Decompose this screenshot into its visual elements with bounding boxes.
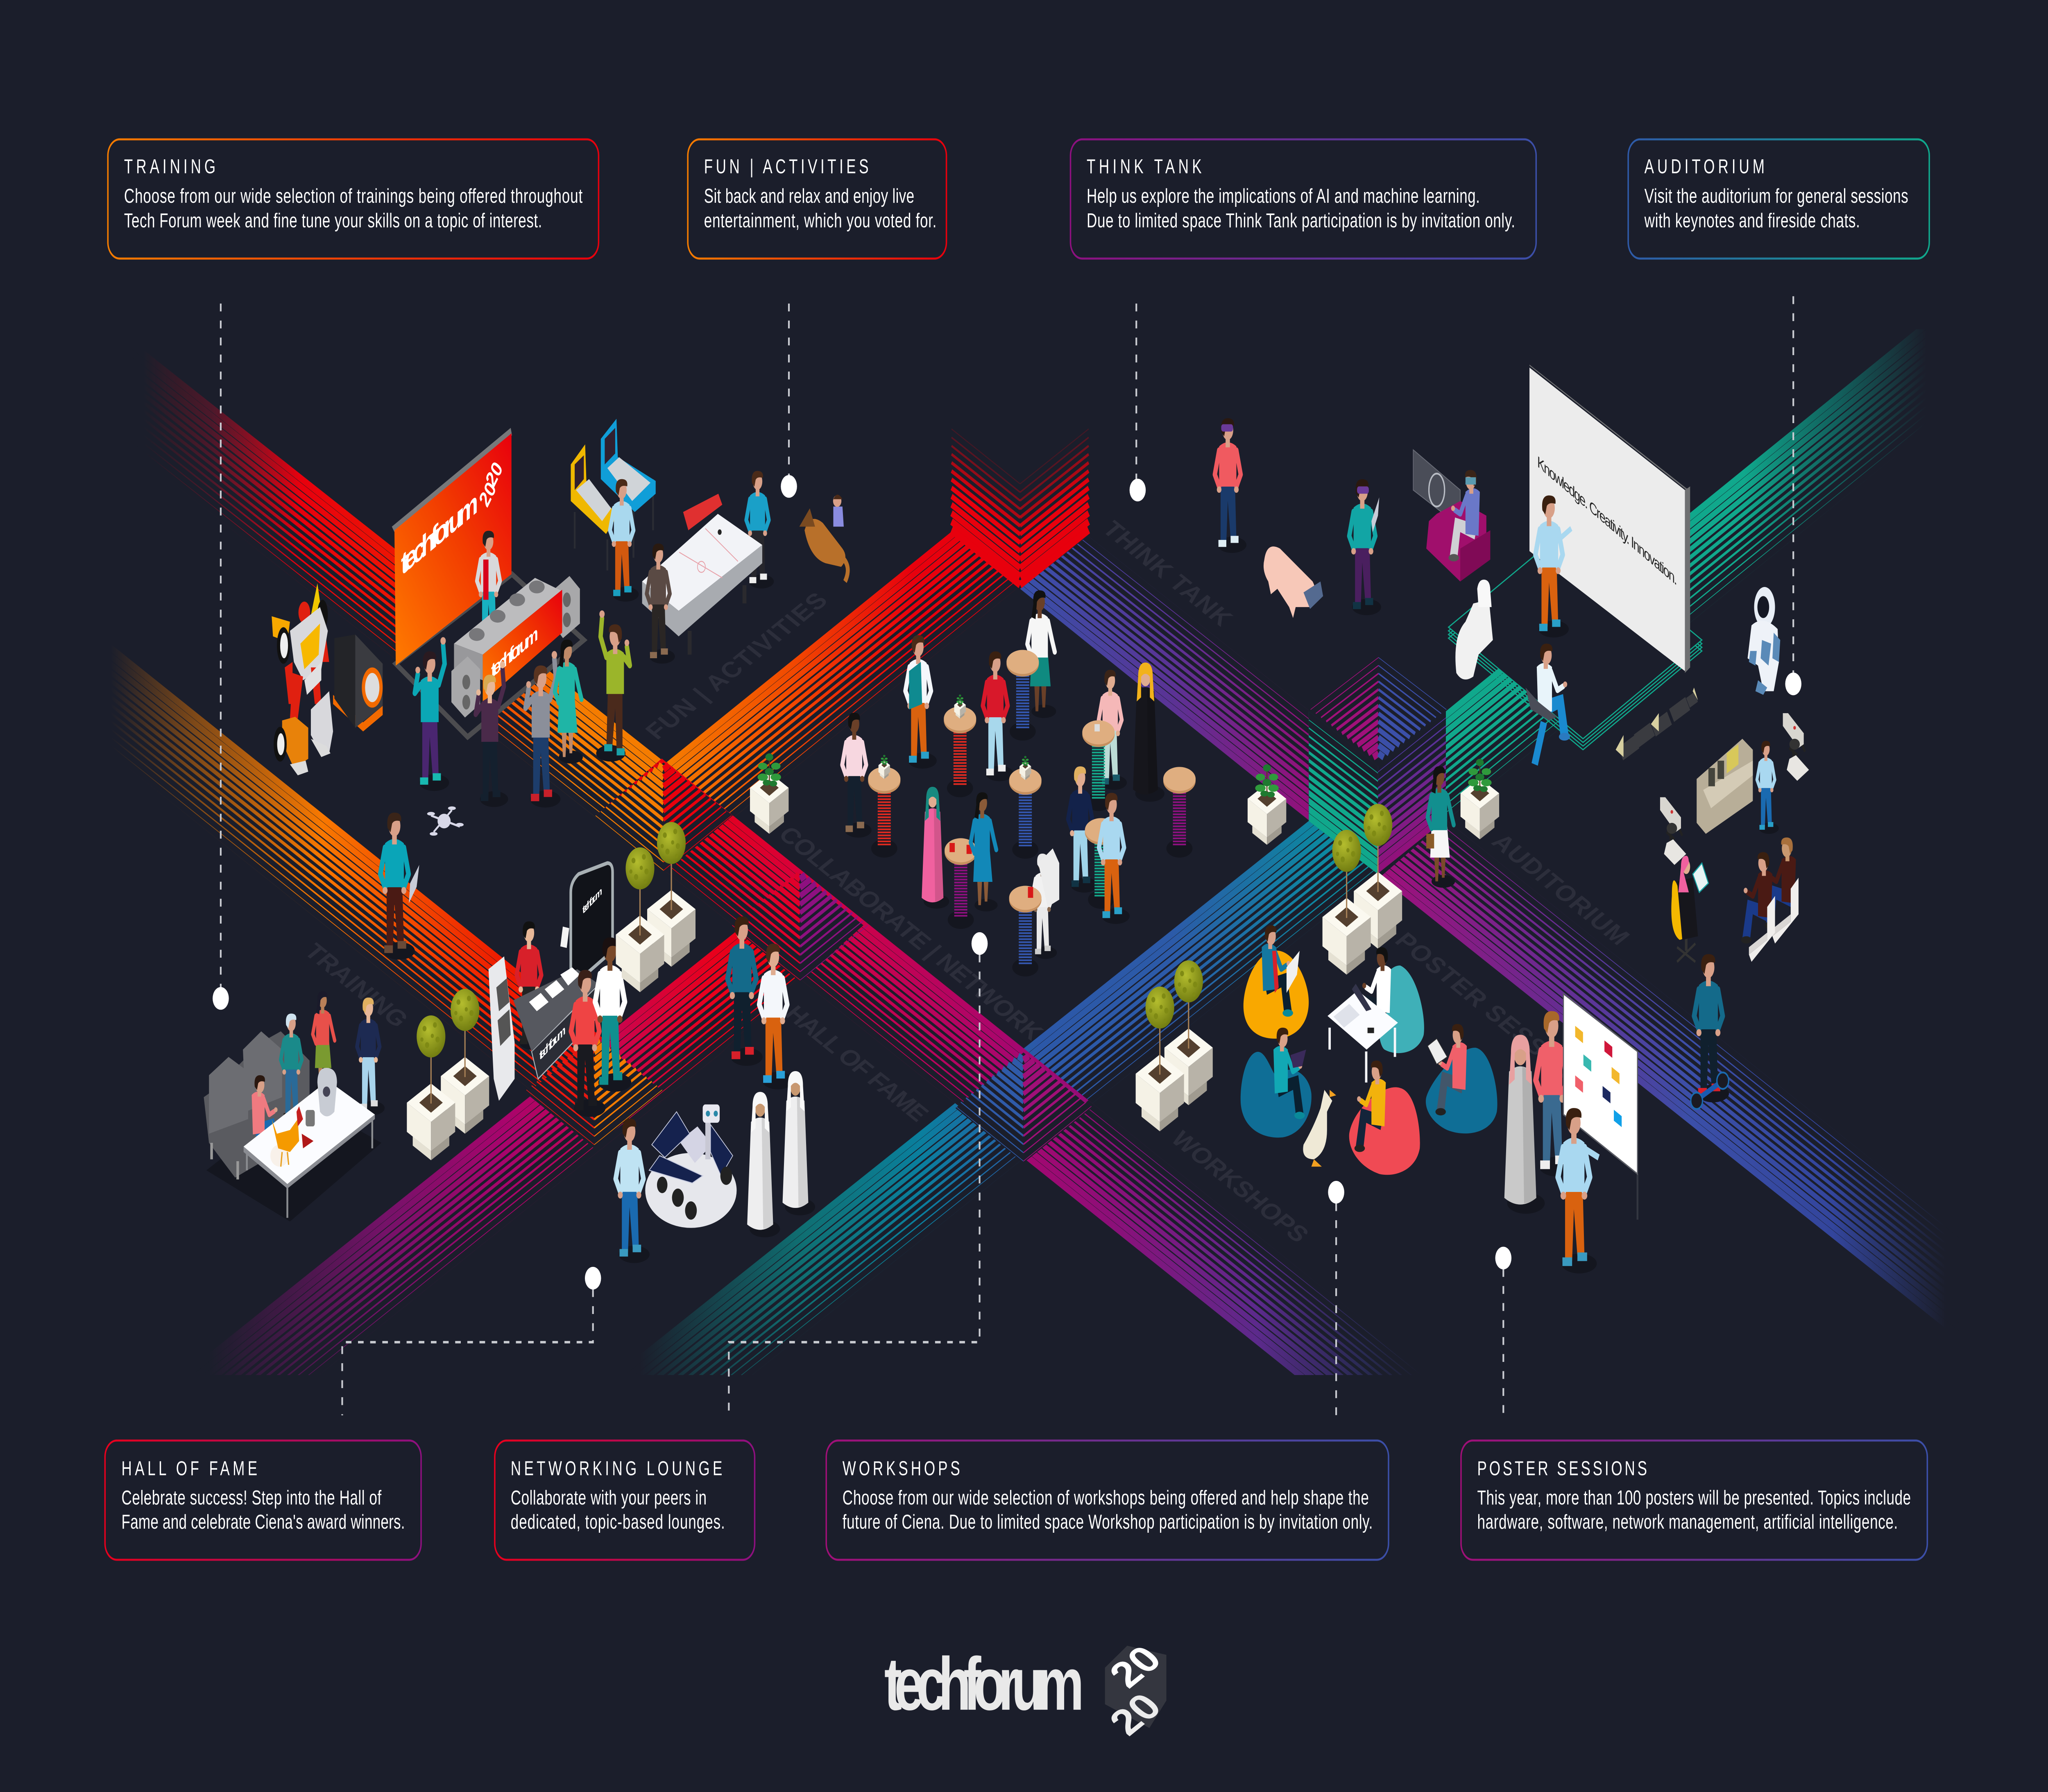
table [1006,650,1039,741]
person: red jacket [983,651,1013,781]
screen tagline: Knowledge. Creativity. Innovation. [1537,452,1677,589]
holographic panel [1413,450,1460,527]
teal bean bag [1360,947,1424,1053]
player front [647,544,675,664]
shadow [206,1097,381,1221]
player back [746,471,774,589]
body text [1477,1486,1911,1534]
scene: DJ stage and big screen [392,428,584,737]
person: man pointing [1558,1108,1599,1273]
speaker left [451,657,480,718]
body text [1087,185,1515,232]
junction diamond: fun and training [596,763,733,874]
woman in sari [313,991,336,1093]
blue bean bag left [1241,1028,1312,1137]
table with cup [1009,886,1042,976]
body text [704,185,936,232]
planters: workshop tree pair right [1323,804,1402,974]
blue bean bag right [1426,1024,1497,1133]
body text: Collaborate with your peers in [511,1486,707,1509]
person: man with backpack [905,635,937,769]
man with cap [281,1014,306,1124]
poster board [1637,1174,1638,1220]
marker dots [213,475,1801,1289]
display stand [489,956,514,1101]
robot [310,583,321,622]
scene: virtual reality area [1215,418,1490,618]
floor band: purple junction segment [1377,709,1447,874]
visitor red top [571,970,605,1117]
deck banner [483,590,562,702]
chevron: red think tank corner [952,429,1089,585]
person: blonde with cap [1068,766,1098,893]
heading: THINK TANK [1087,155,1202,178]
camera: right [1783,713,1809,781]
scene: DJ stage and big screen: 20 [476,477,500,511]
scene: rover exhibit [616,1071,815,1263]
body text: Tech Forum week and fine tune your skills on a topic of interest. [124,209,542,232]
DJ [477,531,505,651]
stage lights [1616,688,1698,760]
panel: training [108,139,598,258]
person: woman pink top [842,713,872,838]
2020 extrusion [1105,1646,1167,1728]
body text: Choose from our wide selection of trainings being offered throughout [124,185,582,208]
table [1163,767,1196,858]
heading: FUN | ACTIVITIES [704,155,869,178]
visitor [616,1119,650,1263]
VR pig [1264,546,1323,618]
planter: plant near think tank band [1248,764,1286,845]
robot: humanoid [1748,587,1780,695]
hen [270,1145,289,1167]
body text: future of Ciena. Due to limited space Workshop participation is by invitation only. [843,1511,1373,1534]
floor band: poster sessions, magenta to blue [1371,761,1959,1339]
person: man on hoverboard [1691,954,1729,1109]
floor label: collaborate and network: COLLABORATE | NETWORK [773,822,1049,1045]
panel: hall of fame [105,1441,421,1560]
body text: This year, more than 100 posters will be presented. Topics include [1477,1486,1911,1509]
scene: dog and child [800,495,848,582]
subwoofer [333,695,383,732]
red bean bag [1349,1060,1420,1175]
person: woman in abaya [1133,663,1164,802]
rover body [679,1126,712,1163]
junction diamond: collaborate [732,874,868,982]
blonde woman [357,997,385,1115]
heading: WORKSHOPS [843,1457,960,1480]
person: astronaut [1032,848,1059,959]
puck [718,529,722,535]
seated girl [251,1075,280,1158]
2020 numerals: 20 [1100,1638,1171,1695]
table with plant [868,755,900,858]
person: pink hijab on chair [1671,856,1708,962]
table legs [690,585,745,655]
floor band: auditorium, teal [1443,316,1933,823]
body text [843,1486,1373,1534]
scene: registration booth: techforum [582,884,602,917]
body text: entertainment, which you voted for. [704,209,936,232]
VR man seated [1448,470,1480,562]
blue pinball [634,479,653,558]
dancer teal dress [555,639,583,763]
panel: poster sessions [1461,1441,1927,1560]
table [1085,818,1117,909]
body text [1644,185,1908,232]
scene: pinball machines [571,419,656,602]
dancer teal [415,637,449,791]
panel: think tank [1071,139,1536,258]
mixer deck [454,578,561,655]
scene: training lounge [204,991,385,1221]
wordmark: techforum [884,1642,1084,1726]
phone-shaped screen [571,863,613,988]
floor label: poster sessions: POSTER SESSIONS [1389,928,1604,1101]
heading: TRAINING [124,155,215,178]
floor band: collaborate falling, red to magenta [588,699,1110,1227]
yellow pinball [575,512,607,571]
panel: auditorium [1628,139,1929,258]
connector: poster sessions [1503,1269,1504,1419]
panel: networking lounge [495,1441,754,1560]
cup [306,1110,315,1126]
2020 numerals: 20 [1100,1686,1171,1743]
dancer blonde [476,661,508,807]
VR woman teal [1349,479,1381,615]
table with cup [1082,720,1115,811]
table with cups [945,838,977,929]
stage platform [396,574,584,737]
scene: air hockey [642,471,774,664]
person: woman glasses [1099,670,1127,790]
scene: auditorium stage [1426,365,1702,888]
floor band: workshops rising, teal to blue [656,821,1377,1375]
heading: AUDITORIUM [1645,155,1765,178]
floor label: training: TRAINING [299,938,415,1032]
magenta sofa [1426,501,1486,582]
junction diamond: auditorium crossing [1309,656,1446,766]
seated man in thobe [1455,580,1493,680]
screen [1529,365,1689,492]
floor band: hall of fame rising, magenta to red [226,932,797,1375]
sticky notes [1575,1026,1622,1127]
sofa [204,1031,310,1178]
floor band: think tank, blue to magenta [1019,481,1319,829]
body text: with keynotes and fireside chats. [1644,209,1860,232]
body text: Visit the auditorium for general sessions [1645,185,1908,208]
logo: techforum 2020 [884,1638,1171,1743]
person: woman white blouse [1027,590,1056,718]
person: man light shirt [1099,793,1130,924]
scene: DJ stage and big screen: techforum [491,621,538,683]
body text [511,1486,725,1534]
table [247,1119,372,1218]
body text: Fame and celebrate Ciena's award winners. [122,1511,405,1534]
planter: plant near auditorium band [1461,759,1499,839]
body text: dedicated, topic-based lounges. [511,1511,725,1534]
solar panels [652,1112,690,1158]
floor label: hall of fame: HALL OF FAME [779,1001,935,1126]
dancer green shirt [596,610,630,761]
junction diamond: hall of fame crossing [956,1053,1092,1163]
VR woman red jacket [1215,418,1246,553]
connector: think tank [1136,304,1137,479]
body text: Choose from our wide selection of workshops being offered and help shape the [843,1486,1369,1509]
connector: networking lounge [729,954,980,1415]
white table [1328,984,1398,1083]
body text: Due to limited space Think Tank participation is by invitation only. [1087,209,1515,232]
table with plant [944,695,976,797]
body text [124,185,582,232]
scene: robot and subwoofer [272,583,383,775]
heading: POSTER SESSIONS [1477,1457,1647,1480]
body text: hardware, software, network management, artificial intelligence. [1477,1511,1898,1534]
junction diamond: training booth [526,1039,662,1149]
people: dancers [415,610,630,808]
floor band: training upper, red to orange [153,358,661,818]
planter: plant near fun band [750,753,788,834]
panel: fun and activities [688,139,947,258]
person: console operator [1757,741,1779,834]
panel: workshops [826,1441,1389,1560]
floor band: fun and activities, orange to red [666,532,1019,817]
heading: HALL OF FAME [122,1457,257,1480]
floor band: training lower, orange to red [118,650,602,1090]
scene: registration booth [489,863,631,1117]
planters: training tree pair [407,989,489,1160]
stage outline [1448,539,1702,750]
goose [1303,1090,1336,1167]
camera: left [1660,797,1686,865]
desk [532,984,605,1079]
wheels [657,1177,667,1193]
dancer grey jacket [526,651,560,808]
speaker right [553,576,580,638]
planters: booth tree pair [616,822,696,992]
visitor white top [595,937,631,1092]
drone [427,807,464,836]
visitors in thobes [747,1092,780,1237]
big screen [392,428,512,532]
person: woman blue dress [971,792,997,911]
yellow bean bag [1244,925,1309,1039]
infographic canvas [104,138,1938,1736]
body text: Sit back and relax and enjoy live [704,185,914,208]
people: handshake pair [727,916,793,1090]
red scorer [683,494,722,530]
floor band: workshops falling, magenta to dark blue [1019,1044,1437,1489]
2020 numerals [1100,1638,1171,1743]
screen logo: techforum [401,483,478,583]
scene: networking tables and people [842,590,1196,976]
floor band: teal junction segment [1306,709,1379,876]
floor label: think tank: THINK TANK [1097,516,1239,631]
scene: bean bag workshop [1241,925,1497,1175]
control console [1697,739,1753,834]
person: man with tablet [381,813,419,960]
scene: poster board and people [1504,954,1729,1273]
man on laptop [1525,643,1570,764]
attendant [517,921,547,1050]
person: woman pink jacket [1536,1011,1575,1176]
pedestal disc [645,1153,736,1228]
person: woman pink dress [922,787,949,908]
scene: registration booth: techforum [539,1022,566,1063]
woman with briefcase [1426,766,1455,888]
connector: hall of fame [342,1289,593,1415]
connector: fun and activities [788,304,789,476]
body text [122,1486,405,1534]
presenter [1536,495,1569,637]
heading: NETWORKING LOUNGE [511,1457,722,1480]
scene: DJ stage and big screen: 20 [482,457,506,491]
floor label: auditorium: AUDITORIUM [1486,829,1636,949]
body text: Celebrate success! Step into the Hall of [122,1486,381,1509]
table with plant [1009,756,1042,859]
connector: workshops [1336,1203,1337,1419]
floor label: workshops: WORKSHOPS [1165,1126,1315,1247]
planters: workshop tree pair left [1136,961,1213,1131]
person: grey robe and turban [1504,1035,1545,1214]
smart speaker [317,1068,337,1116]
table [642,545,762,637]
body text: Help us explore the implications of AI and machine learning. [1087,185,1480,208]
people: seated audience with white chairs [1741,838,1799,962]
floor label: fun and activities: FUN | ACTIVITIES [639,587,834,744]
connector: training [220,304,221,988]
connector: auditorium [1793,296,1794,673]
player [610,479,639,602]
